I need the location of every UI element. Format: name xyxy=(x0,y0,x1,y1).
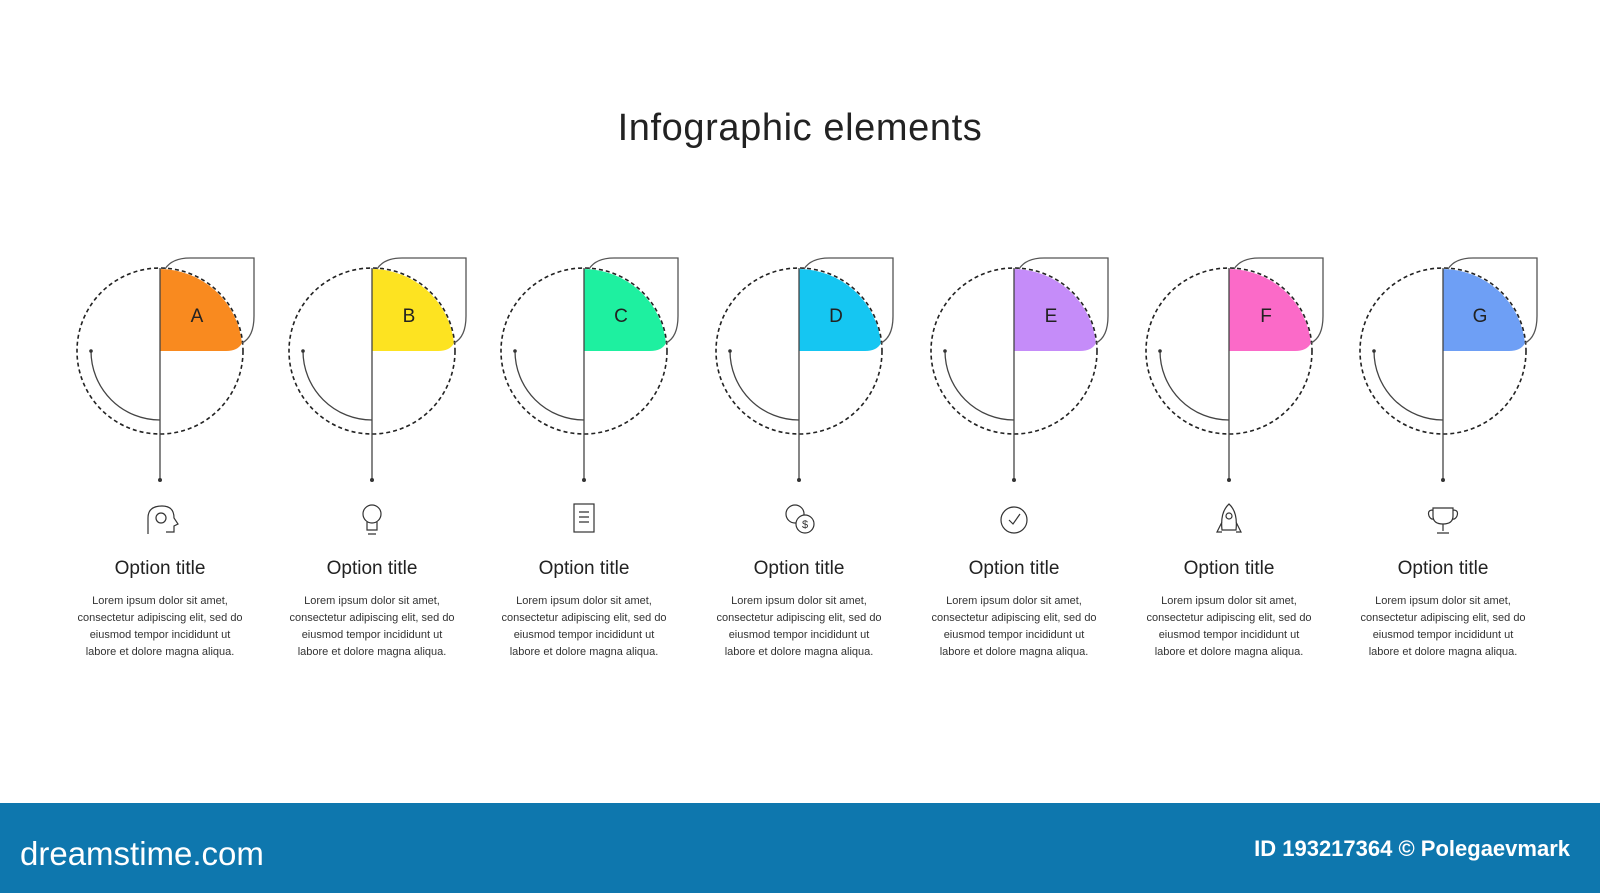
step B: Option title xyxy=(327,558,417,579)
step G: eiusmod tempor incididunt ut xyxy=(1373,629,1513,641)
step C: consectetur adipiscing elit, sed do xyxy=(501,612,667,624)
step E: Option title xyxy=(969,558,1059,579)
step D: labore et dolore magna aliqua. xyxy=(725,646,873,658)
step B: labore et dolore magna aliqua. xyxy=(298,646,446,658)
step F: eiusmod tempor incididunt ut xyxy=(1159,629,1299,641)
step A: Option title xyxy=(115,558,205,579)
icon: coins: $ xyxy=(802,519,808,531)
step D: Lorem ipsum dolor sit amet, xyxy=(731,595,867,607)
step A: labore et dolore magna aliqua. xyxy=(86,646,234,658)
step F: F xyxy=(1260,306,1272,327)
footer banner xyxy=(0,803,1600,893)
step F: labore et dolore magna aliqua. xyxy=(1155,646,1303,658)
step C: eiusmod tempor incididunt ut xyxy=(514,629,654,641)
step E xyxy=(931,258,1108,658)
footer banner: dreamstime.com xyxy=(20,835,264,872)
step E: labore et dolore magna aliqua. xyxy=(940,646,1088,658)
step A xyxy=(77,258,254,658)
icon: rocket xyxy=(1217,504,1241,532)
step E: consectetur adipiscing elit, sed do xyxy=(931,612,1097,624)
step C: labore et dolore magna aliqua. xyxy=(510,646,658,658)
step E: Lorem ipsum dolor sit amet, xyxy=(946,595,1082,607)
step C: Lorem ipsum dolor sit amet, xyxy=(516,595,652,607)
icon: document xyxy=(574,504,594,532)
step G: Lorem ipsum dolor sit amet, xyxy=(1375,595,1511,607)
icon: clock xyxy=(1001,507,1027,533)
step F: Option title xyxy=(1184,558,1274,579)
footer banner: ID 193217364 © Polegaevmark xyxy=(1254,836,1571,861)
step B: consectetur adipiscing elit, sed do xyxy=(289,612,455,624)
step B: eiusmod tempor incididunt ut xyxy=(302,629,442,641)
step A: Lorem ipsum dolor sit amet, xyxy=(92,595,228,607)
step B xyxy=(289,258,466,658)
step D: Option title xyxy=(754,558,844,579)
step D: eiusmod tempor incididunt ut xyxy=(729,629,869,641)
step G xyxy=(1360,258,1537,658)
step B: Lorem ipsum dolor sit amet, xyxy=(304,595,440,607)
step B: B xyxy=(403,306,415,327)
step A: eiusmod tempor incididunt ut xyxy=(90,629,230,641)
step C: C xyxy=(614,306,628,327)
step A: A xyxy=(191,306,204,327)
step F: Lorem ipsum dolor sit amet, xyxy=(1161,595,1297,607)
step G: labore et dolore magna aliqua. xyxy=(1369,646,1517,658)
title: Infographic elements xyxy=(618,107,982,149)
step D: consectetur adipiscing elit, sed do xyxy=(716,612,882,624)
icon: trophy xyxy=(1428,508,1458,533)
step G: G xyxy=(1473,306,1487,327)
icon: head gear xyxy=(148,506,178,534)
step E: eiusmod tempor incididunt ut xyxy=(944,629,1084,641)
step A: consectetur adipiscing elit, sed do xyxy=(77,612,243,624)
step F xyxy=(1146,258,1323,658)
icon: bulb xyxy=(363,505,381,534)
step D xyxy=(716,258,893,658)
step C xyxy=(501,258,678,658)
step D: D xyxy=(829,306,843,327)
step G: Option title xyxy=(1398,558,1488,579)
step E: E xyxy=(1045,306,1057,327)
step G: consectetur adipiscing elit, sed do xyxy=(1360,612,1526,624)
icon: coins xyxy=(786,505,814,533)
step C: Option title xyxy=(539,558,629,579)
step F: consectetur adipiscing elit, sed do xyxy=(1146,612,1312,624)
